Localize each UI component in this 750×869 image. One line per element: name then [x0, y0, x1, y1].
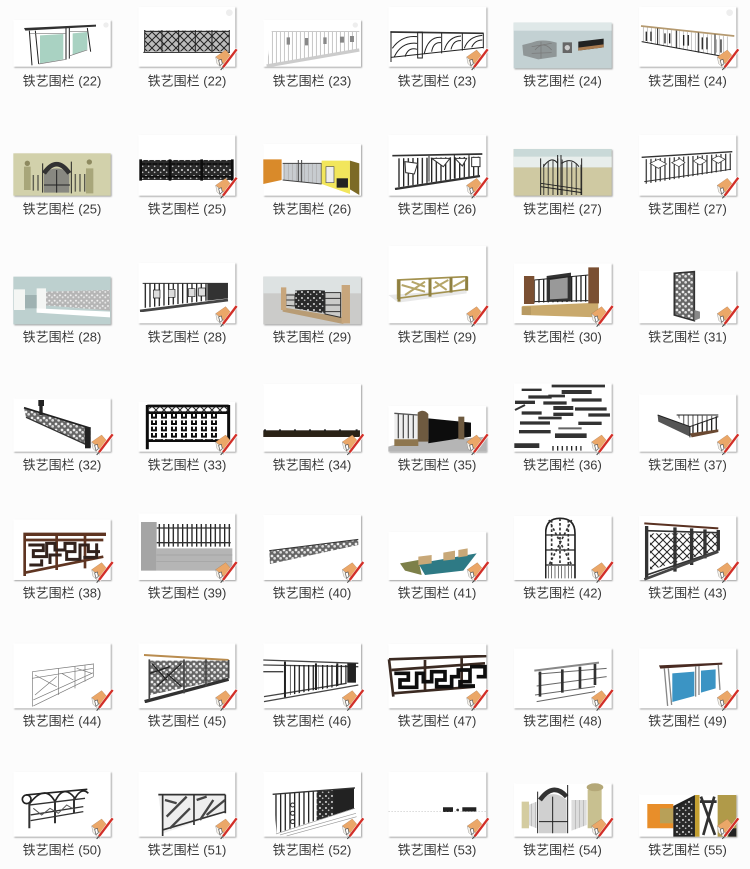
label: 铁艺围栏 (47)	[398, 714, 476, 728]
card: railing 27	[639, 135, 739, 216]
thumbnail	[639, 135, 739, 198]
label: 铁艺围栏 (54)	[523, 842, 602, 858]
card: orange wall 55	[639, 794, 739, 858]
label: 铁艺围栏 (40)	[273, 586, 351, 600]
label: 铁艺围栏 (37)	[648, 458, 727, 472]
card: grand gate 54	[514, 783, 613, 858]
thumbnail	[263, 20, 361, 67]
label: 铁艺围栏 (31)	[648, 330, 727, 344]
label: 铁艺围栏 (45)	[148, 714, 226, 728]
label: 铁艺围栏 (22)	[148, 74, 226, 88]
thumbnail	[388, 135, 488, 198]
card: branches 51	[138, 772, 237, 858]
thumbnail	[639, 7, 739, 70]
thumbnail	[138, 7, 237, 70]
label: 铁艺围栏 (23)	[398, 74, 476, 88]
thumbnail	[13, 277, 111, 324]
card: long fence 32	[13, 398, 113, 472]
card: model 41	[388, 532, 489, 600]
thumbnail	[138, 772, 237, 839]
label: 铁艺围栏 (25)	[148, 202, 226, 216]
label: 铁艺围栏 (26)	[273, 202, 351, 216]
card: railing 22 lattice	[138, 7, 237, 88]
label: 铁艺围栏 (25)	[23, 202, 101, 216]
card: railing 28	[138, 263, 237, 344]
card: sketch railing 46	[263, 643, 364, 728]
card: brick gate 30	[514, 263, 613, 344]
card: black railing 33	[138, 402, 237, 472]
card: ornate gate 25	[13, 153, 111, 216]
thumbnail	[514, 783, 613, 839]
label: 铁艺围栏 (44)	[23, 714, 101, 728]
thumbnail	[263, 384, 364, 455]
thumbnail	[13, 643, 113, 711]
card: arched railing 50	[13, 772, 113, 858]
thumbnail	[639, 271, 739, 327]
thumbnail	[263, 144, 361, 196]
label: 铁艺围栏 (55)	[648, 842, 727, 858]
thumbnail	[514, 23, 612, 68]
label: 铁艺围栏 (35)	[398, 458, 476, 472]
thumbnail	[138, 643, 237, 711]
label: 铁艺围栏 (38)	[23, 586, 101, 600]
label: 铁艺围栏 (29)	[398, 330, 476, 344]
thumbnail	[13, 772, 113, 839]
thumbnail	[388, 772, 489, 839]
card: railing 24 tan rail	[639, 7, 739, 88]
card: dark wall 35	[388, 406, 488, 472]
label: 铁艺围栏 (49)	[648, 714, 727, 728]
card: gate 27 sand	[514, 149, 612, 216]
thumbnail	[388, 7, 488, 70]
label: 铁艺围栏 (28)	[23, 330, 101, 344]
card: ornamental panel 31	[639, 271, 739, 344]
thumbnail	[388, 532, 489, 583]
thumbnail	[138, 402, 237, 455]
thumbnail	[639, 794, 739, 839]
card: scattered pieces 36	[514, 383, 613, 472]
label: 铁艺围栏 (30)	[523, 330, 602, 344]
thumbnail	[514, 648, 613, 711]
card: railing 22 glass	[13, 20, 111, 88]
thumbnail	[13, 153, 111, 196]
label: 铁艺围栏 (41)	[398, 586, 476, 600]
card: railing 23 light	[263, 20, 361, 88]
label: 铁艺围栏 (39)	[148, 586, 226, 600]
thumbnail	[263, 772, 364, 839]
label: 铁艺围栏 (23)	[273, 74, 351, 88]
card: tan fence 29	[388, 246, 488, 344]
thumbnail	[514, 263, 613, 327]
label: 铁艺围栏 (24)	[523, 74, 602, 88]
thumbnail	[138, 263, 237, 327]
thumbnail	[388, 644, 488, 711]
card: diamond railing 43	[639, 516, 739, 600]
card: dark perspective railing 52	[263, 772, 364, 858]
label: 铁艺围栏 (48)	[523, 714, 602, 728]
card: chinese lattice 47	[388, 644, 488, 728]
card: wall with spikes 39	[138, 513, 237, 600]
card: gates on blue-grey	[514, 23, 612, 89]
label: 铁艺围栏 (50)	[23, 842, 101, 858]
thumbnail	[263, 515, 364, 583]
card: tiny models 53	[388, 772, 489, 858]
thumbnail	[263, 643, 364, 711]
card: corner fence 37	[639, 394, 739, 472]
card: blue glass 49	[639, 648, 739, 728]
thumbnail	[388, 246, 488, 327]
label: 铁艺围栏 (51)	[148, 842, 226, 858]
thumbnail	[13, 398, 113, 455]
card: dark fence 25	[138, 135, 237, 216]
thumbnail	[514, 383, 613, 455]
thumbnail	[639, 516, 739, 583]
card: colored walls 26	[263, 144, 361, 216]
thumbnail	[639, 648, 739, 711]
label: 铁艺围栏 (26)	[398, 202, 476, 216]
label: 铁艺围栏 (36)	[523, 458, 602, 472]
card: wall 28	[13, 277, 111, 344]
thumbnail	[514, 516, 613, 583]
card: arched gate 42	[514, 516, 613, 600]
thumbnail	[13, 20, 111, 67]
thumbnail	[13, 519, 113, 583]
thumbnail	[138, 513, 237, 583]
thumbnail	[639, 394, 739, 455]
label: 铁艺围栏 (53)	[398, 842, 476, 858]
label: 铁艺围栏 (33)	[148, 458, 226, 472]
label: 铁艺围栏 (28)	[148, 330, 226, 344]
label: 铁艺围栏 (29)	[273, 330, 351, 344]
label: 铁艺围栏 (24)	[648, 74, 727, 88]
label: 铁艺围栏 (34)	[273, 458, 351, 472]
label: 铁艺围栏 (27)	[648, 202, 727, 216]
thumbnail	[514, 149, 612, 196]
label: 铁艺围栏 (22)	[23, 74, 101, 88]
label: 铁艺围栏 (52)	[273, 842, 351, 858]
label: 铁艺围栏 (32)	[23, 458, 101, 472]
label: 铁艺围栏 (42)	[523, 586, 602, 600]
card: railing 26	[388, 135, 488, 216]
label: 铁艺围栏 (27)	[523, 202, 602, 216]
card: light railing 44	[13, 643, 113, 728]
thumbnail	[263, 277, 361, 324]
thumbnail	[138, 135, 237, 198]
card: brown lattice 38	[13, 519, 113, 600]
card: thin bar 34	[263, 384, 364, 472]
label: 铁艺围栏 (43)	[648, 586, 727, 600]
card: cracked ice railing 45	[138, 643, 237, 728]
card: brick pier fence 29	[263, 277, 361, 344]
thumbnail	[388, 406, 488, 455]
card: rail fence 48	[514, 648, 613, 728]
label: 铁艺围栏 (46)	[273, 714, 351, 728]
card: railing 23 arcs	[388, 7, 488, 88]
card: slanted strip 40	[263, 515, 364, 600]
